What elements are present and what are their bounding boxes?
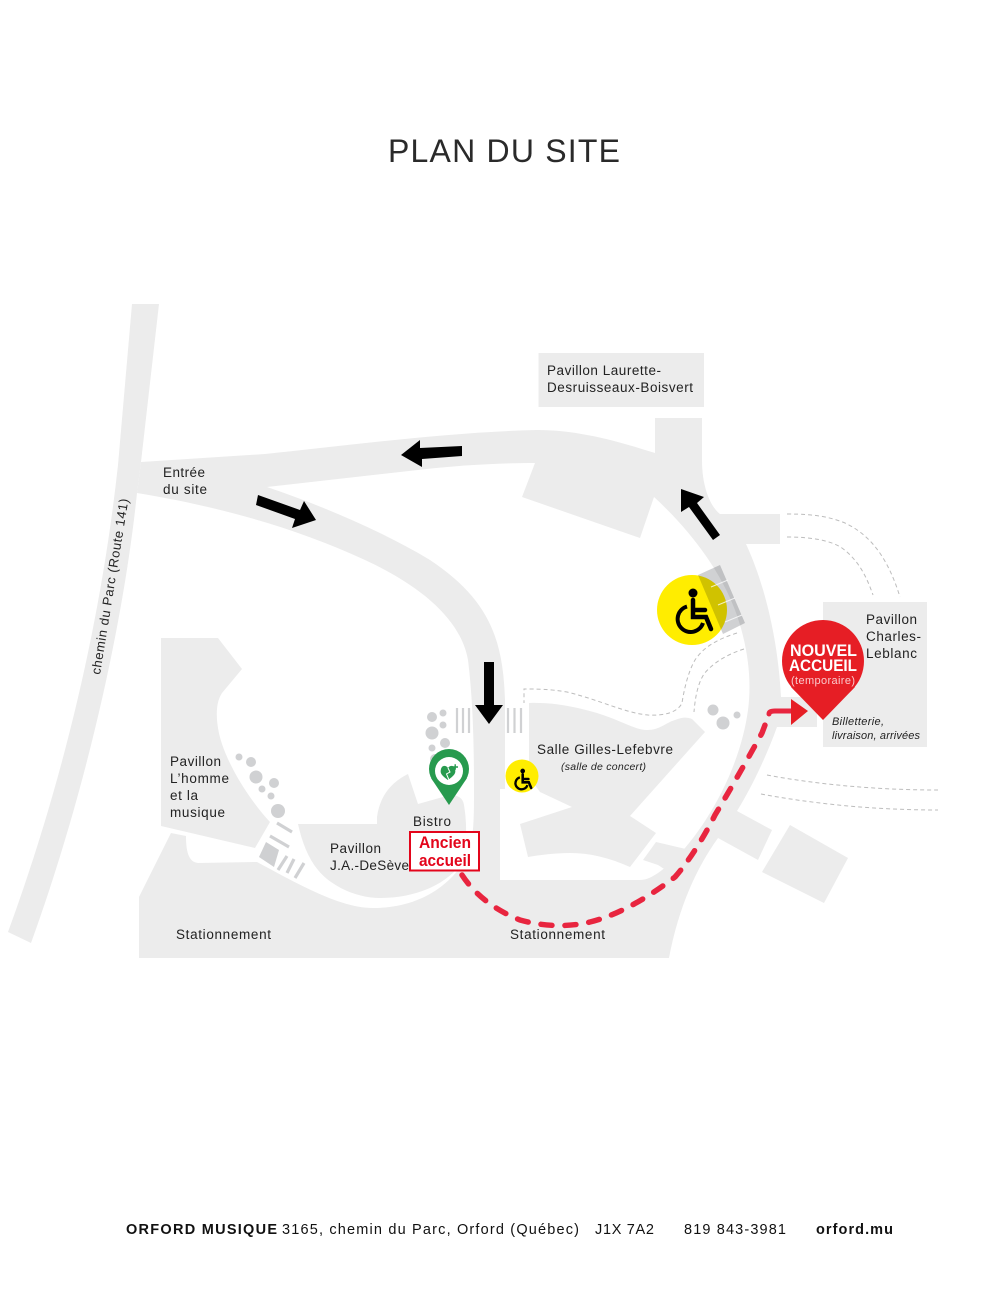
footer contact line: 3165, chemin du Parc, Orford (Québec): [282, 1222, 579, 1238]
arrow: down to Salle Gilles-Lefebvre: [475, 662, 503, 724]
building: eastern annex: [762, 825, 848, 903]
route end segment: [769, 711, 792, 714]
label: billetterie: [832, 716, 920, 742]
label: Salle Gilles-Lefebvre: Salle Gilles-Lefebvre: [537, 742, 673, 757]
label: Pavillon J.A.-DeSève: [330, 841, 409, 873]
callout: ancien accueil: accueil: [419, 851, 471, 870]
building: south annex: [643, 842, 690, 874]
label: Salle Gilles-Lefebvre: (salle de concert): [561, 761, 646, 773]
route arrowhead: [791, 699, 808, 725]
label: billetterie: livraison, arrivées: [832, 730, 920, 742]
building: Salle Gilles-Lefebvre: [520, 703, 705, 867]
label: Pavillon L'homme et la musique: L’homme: [170, 771, 229, 786]
callout: ancien accueil: Ancien: [419, 833, 471, 852]
label: entrée du site: Entrée: [163, 465, 205, 480]
grey parking stalls: [698, 565, 745, 634]
label: Pavillon L'homme et la musique: et la: [170, 788, 198, 803]
label: Pavillon Laurette-Desruisseaux-Boisvert: Desruisseaux-Boisvert: [547, 380, 693, 395]
label: Pavillon L'homme et la musique: [170, 754, 229, 820]
footer contact line: J1X 7A2: [595, 1222, 654, 1238]
road: chemin du Parc: [8, 304, 159, 943]
dashed footpaths: [524, 514, 938, 810]
pin label: nouvel: NOUVEL: [790, 641, 857, 660]
white interior of the loop: [267, 463, 749, 880]
icon: green defibrillator pin: [429, 749, 469, 805]
icon: wheelchair: [678, 588, 711, 632]
footer contact line: orford.mu: [816, 1222, 893, 1238]
pin label: temporaire: (temporaire): [791, 675, 855, 687]
label: Stationnement west: Stationnement: [176, 927, 271, 942]
label: Bistro: Bistro: [413, 814, 451, 829]
footer contact line: ORFORD MUSIQUE: [126, 1222, 277, 1238]
label: Pavillon Charles-Leblanc: Charles-: [866, 629, 921, 644]
label: Pavillon Charles-Leblanc: [866, 612, 921, 661]
building: Pavillon Laurette-Desruisseaux-Boisvert: [538, 353, 704, 407]
crosswalk and patio near Pavillon L'homme: [259, 823, 304, 878]
trees near Pavillon Charles-Leblanc: [708, 704, 740, 730]
label: Pavillon Charles-Leblanc: Pavillon: [866, 612, 917, 627]
map: [8, 304, 938, 958]
icon: small wheelchair marker: [506, 760, 538, 792]
trees near Pavillon L'homme et la musique: [236, 754, 285, 818]
label: Pavillon Charles-Leblanc: Leblanc: [866, 646, 917, 661]
label: billetterie: Billetterie,: [832, 716, 884, 728]
arrow: east from entrance: [256, 495, 316, 528]
label: Pavillon J.A.-DeSève: J.A.-DeSève: [330, 858, 409, 873]
arrow: west on upper road: [401, 440, 462, 467]
arrow: north on east road: [681, 489, 720, 540]
building: Pavillon Charles-Leblanc: [823, 602, 927, 747]
building: Pavillon J.A.-DeSève: [298, 774, 466, 898]
label: entrée du site: du site: [163, 482, 207, 497]
red dashed route: [462, 717, 768, 926]
label: Pavillon L'homme et la musique: musique: [170, 805, 225, 820]
label: Pavillon Laurette-Desruisseaux-Boisvert: [547, 363, 693, 395]
footer contact line: [126, 1222, 893, 1238]
red pin: nouvel accueil: [782, 620, 864, 720]
pin label: accueil: ACCUEIL: [789, 656, 857, 675]
title: PLAN DU SITE: [388, 133, 620, 169]
crosswalks at Salle Gilles-Lefebvre: [457, 708, 521, 733]
yellow accessibility circle: [657, 575, 727, 645]
label: entrée du site: [163, 465, 207, 497]
accessible parking zone: [657, 565, 745, 645]
label: Stationnement east: Stationnement: [510, 927, 605, 942]
label: chemin du Parc: chemin du Parc (Route 141): [88, 497, 131, 675]
roads and parking: [137, 418, 817, 958]
label: Pavillon J.A.-DeSève: Pavillon: [330, 841, 381, 856]
label: Pavillon Laurette-Desruisseaux-Boisvert: Pavillon Laurette-: [547, 363, 661, 378]
label: Salle Gilles-Lefebvre: [537, 742, 673, 773]
callout: ancien accueil: [410, 832, 479, 870]
stall lines: [711, 580, 742, 622]
footer contact line: 819 843-3981: [684, 1222, 786, 1238]
label: Pavillon L'homme et la musique: Pavillon: [170, 754, 221, 769]
building: Pavillon L'homme et la musique: [161, 638, 270, 848]
trees near Bistro: [426, 710, 450, 764]
